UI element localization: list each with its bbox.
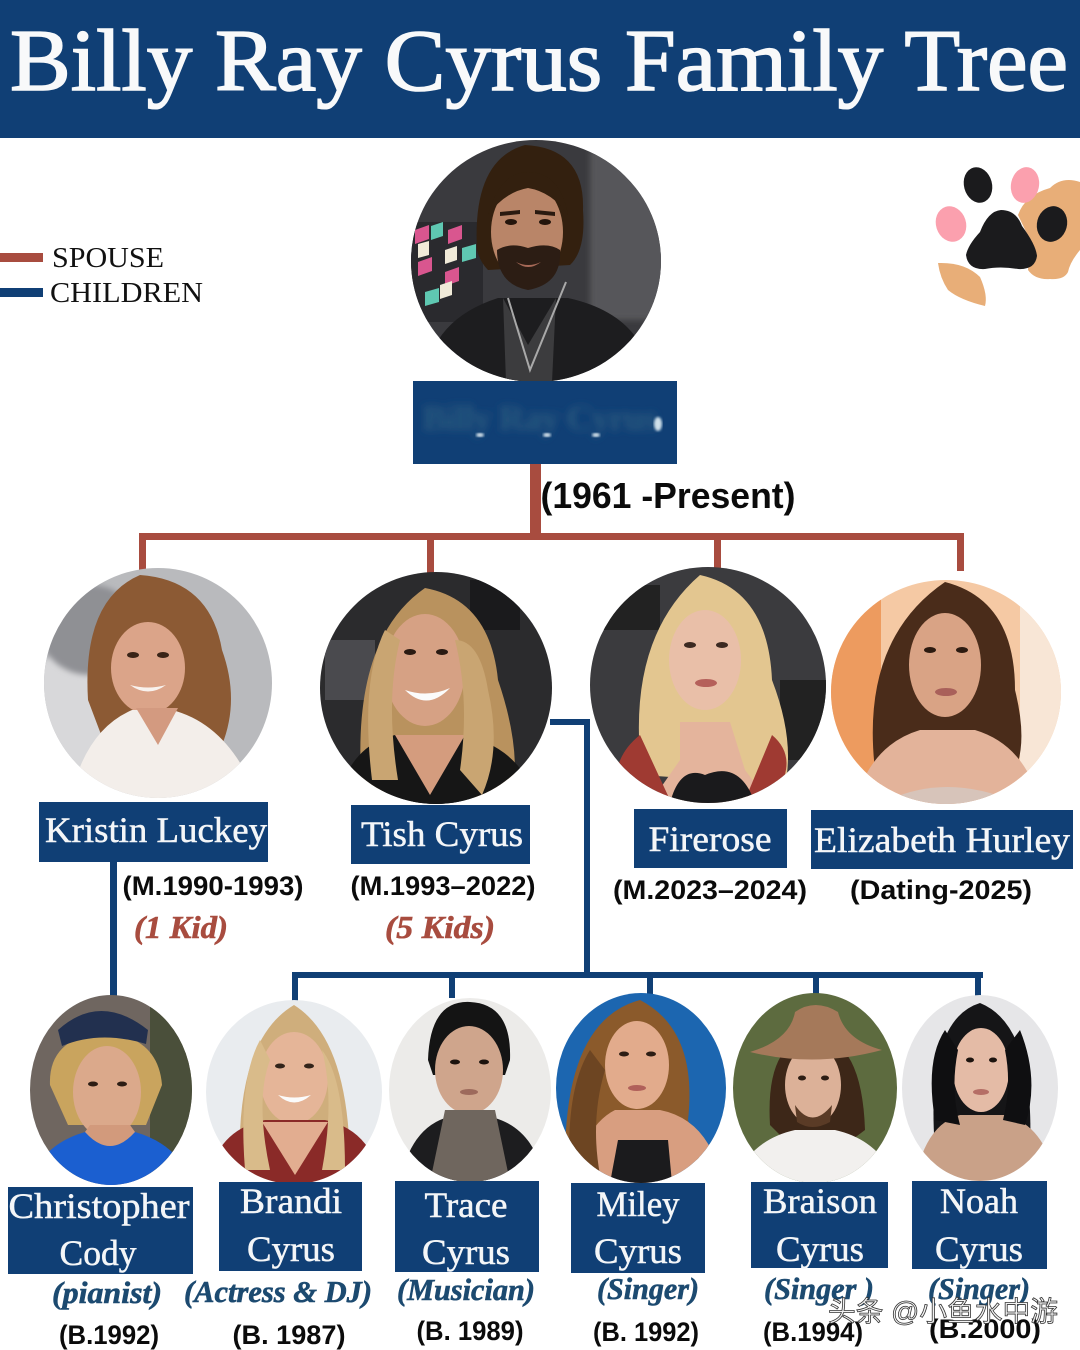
portrait: Kristin Luckey bbox=[44, 568, 272, 798]
role labels: (pianist) bbox=[52, 1275, 162, 1310]
birth years: (B. 1987) bbox=[232, 1320, 346, 1350]
dating dates: Elizabeth Hurley: (Dating-2025) bbox=[850, 875, 1032, 905]
portrait: Firerose bbox=[590, 567, 830, 803]
name box: Billy Ray Cyrus (blurred): Billy Ray Cyrus bbox=[422, 398, 658, 438]
marriage dates: Kristin Luckey: (M.1990-1993) bbox=[122, 871, 304, 901]
name box: Noah Cyrus bbox=[912, 1181, 1047, 1269]
name box: Billy Ray Cyrus (blurred) bbox=[413, 381, 677, 464]
name box: Braison Cyrus: Braison bbox=[763, 1181, 877, 1221]
portrait: Tish Cyrus bbox=[320, 572, 552, 804]
name box: Braison Cyrus bbox=[751, 1181, 888, 1269]
role labels: (Musician) bbox=[397, 1272, 535, 1307]
name box: Firerose bbox=[634, 809, 787, 868]
birth years bbox=[59, 1314, 1041, 1350]
name box: Elizabeth Hurley: Elizabeth Hurley bbox=[814, 820, 1070, 860]
name box: Christopher Cody bbox=[8, 1186, 193, 1274]
legend: spouse and children bbox=[0, 243, 203, 309]
dates: Billy Ray Cyrus: (1961 -Present) bbox=[540, 475, 796, 516]
role labels: (Singer) bbox=[597, 1271, 699, 1306]
portrait: Miley Cyrus bbox=[556, 993, 726, 1183]
portrait: Christopher Cody bbox=[30, 995, 192, 1185]
name box: Miley Cyrus: Miley bbox=[596, 1184, 680, 1224]
name box: Trace Cyrus: Trace bbox=[424, 1185, 508, 1225]
name box: Trace Cyrus: Cyrus bbox=[422, 1232, 510, 1272]
title banner: Billy Ray Cyrus Family Tree bbox=[10, 13, 1068, 110]
portrait: Billy Ray Cyrus bbox=[411, 140, 670, 382]
name box: Braison Cyrus: Cyrus bbox=[776, 1229, 864, 1269]
name box: Kristin Luckey: Kristin Luckey bbox=[45, 810, 267, 850]
kids count: Tish Cyrus: (5 Kids) bbox=[385, 909, 495, 945]
name box: Noah Cyrus: Cyrus bbox=[935, 1229, 1023, 1269]
name box: Noah Cyrus: Noah bbox=[940, 1181, 1018, 1221]
name box: Miley Cyrus bbox=[571, 1183, 705, 1273]
portrait: Noah Cyrus bbox=[902, 995, 1058, 1181]
birth years: (B.1994) bbox=[763, 1317, 863, 1347]
birth years: (B. 1992) bbox=[593, 1317, 699, 1347]
spouse connector lines bbox=[139, 464, 964, 575]
portrait: Trace Cyrus bbox=[389, 998, 551, 1182]
legend: spouse and children: CHILDREN bbox=[50, 278, 203, 309]
name box: Christopher Cody: Christopher bbox=[8, 1186, 190, 1226]
icon: paw print bbox=[931, 164, 1080, 306]
children connector lines bbox=[110, 719, 983, 1002]
name box: Christopher Cody: Cody bbox=[60, 1233, 136, 1273]
portrait: Braison Cyrus bbox=[733, 993, 897, 1183]
name box: Tish Cyrus bbox=[351, 805, 530, 864]
name box: Brandi Cyrus bbox=[219, 1181, 362, 1271]
name box: Elizabeth Hurley bbox=[811, 810, 1073, 869]
marriage dates: Tish Cyrus: (M.1993–2022) bbox=[350, 871, 536, 901]
name box: Trace Cyrus bbox=[395, 1181, 539, 1272]
role labels: (Singer) bbox=[928, 1271, 1030, 1306]
name box: Miley Cyrus: Cyrus bbox=[594, 1231, 682, 1271]
name box: Kristin Luckey bbox=[39, 802, 268, 862]
portrait: Elizabeth Hurley bbox=[831, 580, 1061, 804]
birth years: (B.2000) bbox=[929, 1314, 1041, 1344]
title banner bbox=[0, 0, 1080, 138]
role labels bbox=[52, 1271, 1030, 1310]
name box: Firerose: Firerose bbox=[648, 819, 772, 859]
name box: Brandi Cyrus: Cyrus bbox=[247, 1229, 335, 1269]
watermark: 头条 @小鱼水中游 bbox=[828, 1296, 1058, 1327]
legend: spouse and children: SPOUSE bbox=[52, 243, 164, 274]
kids count: Kristin Luckey: (1 Kid) bbox=[134, 909, 228, 945]
birth years: (B. 1989) bbox=[416, 1316, 524, 1346]
marriage dates: Firerose: (M.2023–2024) bbox=[613, 875, 807, 905]
birth years: (B.1992) bbox=[59, 1320, 159, 1350]
role labels: (Actress & DJ) bbox=[184, 1274, 372, 1309]
portrait: Brandi Cyrus bbox=[206, 1000, 382, 1184]
name box: Brandi Cyrus: Brandi bbox=[240, 1181, 342, 1221]
name box: Tish Cyrus: Tish Cyrus bbox=[361, 814, 523, 854]
role labels: (Singer ) bbox=[764, 1271, 874, 1306]
